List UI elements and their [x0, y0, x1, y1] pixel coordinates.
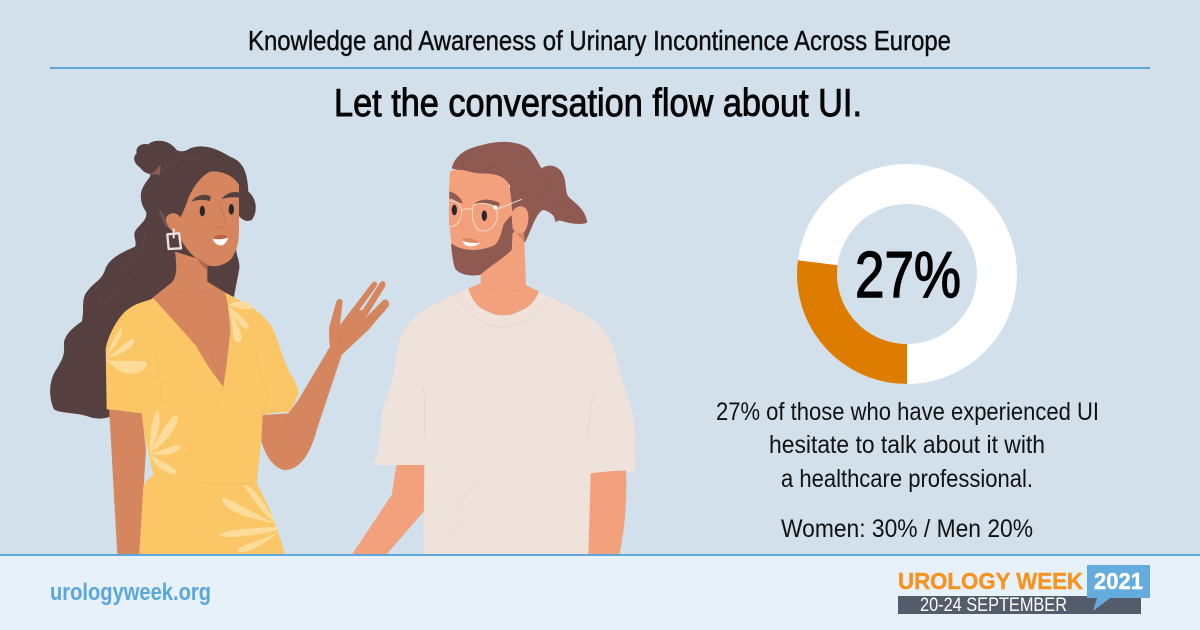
left arm [352, 463, 425, 555]
eyes [200, 206, 205, 216]
eyebrows [449, 192, 500, 207]
hair tie [149, 164, 161, 175]
logo dates: 20-24 SEPTEMBER [920, 595, 1067, 616]
mouth [462, 238, 480, 243]
donut chart [817, 184, 997, 364]
shirt collar and folds [424, 287, 594, 535]
dress pattern [106, 301, 279, 552]
left arm [109, 407, 146, 555]
neck and chest [152, 252, 231, 388]
hair and ponytail [452, 142, 587, 242]
illustration: man [352, 142, 635, 555]
skin lines [125, 290, 385, 478]
title: Knowledge and Awareness of Urinary Incontinence Across Europe [248, 25, 951, 56]
dress [106, 293, 298, 555]
eyebrows [192, 192, 239, 202]
eyes [452, 205, 457, 215]
footer band [0, 554, 1200, 630]
donut ring: remainder [817, 184, 997, 364]
neck [468, 231, 539, 318]
statistic description: hesitate to talk about it with [769, 431, 1045, 459]
earring [167, 229, 181, 249]
beard [451, 215, 513, 275]
right arm and hand [261, 281, 389, 470]
dress seams [156, 353, 267, 484]
donut segment: 27% [817, 263, 907, 364]
footer url: urologyweek.org [50, 579, 211, 606]
face [166, 171, 239, 266]
statistic description [716, 398, 1099, 493]
glasses [449, 199, 522, 231]
mouth [212, 235, 228, 239]
hair shadow by ear [159, 207, 167, 229]
logo: Urology Week 2021 [898, 565, 1150, 616]
logo speech bubble [1087, 565, 1150, 611]
nose [461, 212, 473, 230]
ear shadow [516, 231, 524, 242]
face [449, 170, 513, 255]
statistic description: a healthcare professional. [781, 465, 1033, 493]
illustration: woman [50, 141, 389, 555]
ear [511, 206, 528, 235]
statistic description: 27% of those who have experienced UI [716, 398, 1099, 426]
logo year: 2021 [1094, 568, 1143, 594]
hair [50, 141, 256, 419]
nose [216, 204, 225, 228]
hair strands [88, 158, 210, 307]
shirt [374, 288, 635, 555]
hair strands [463, 153, 565, 218]
gender breakdown: Women: 30% / Men 20% [781, 515, 1033, 543]
right arm [586, 470, 626, 555]
logo date bar [898, 596, 1141, 614]
heading: Let the conversation flow about UI. [334, 82, 862, 125]
logo wordmark: UROLOGY WEEK [898, 568, 1083, 594]
neck shadow [196, 256, 207, 270]
donut value: 27% [855, 238, 961, 311]
